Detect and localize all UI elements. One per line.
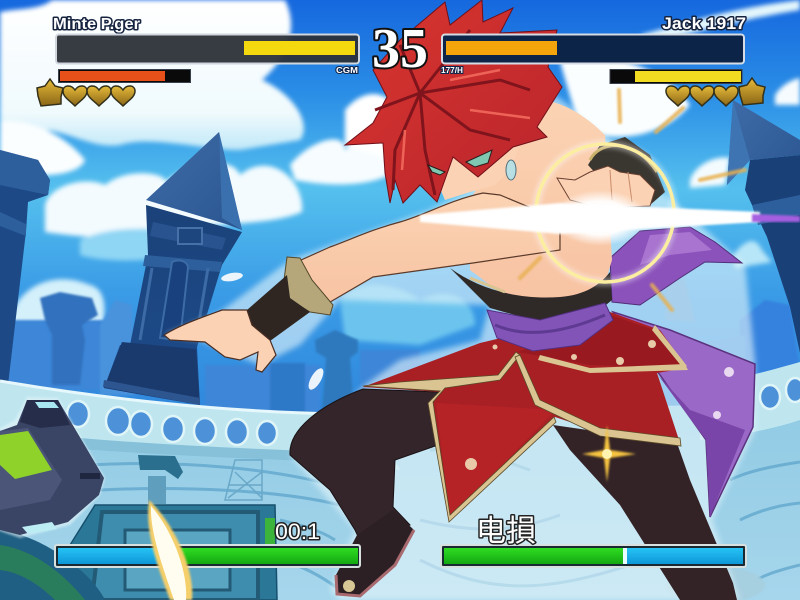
torso: [470, 100, 612, 300]
lime screen: [0, 431, 52, 479]
player two stamina bar: [441, 545, 746, 567]
gloved fist: [588, 137, 665, 205]
arena seating rows: [90, 449, 800, 590]
teal panel machine: [70, 505, 277, 600]
small tower left: [40, 292, 98, 385]
golden sparkle: [582, 425, 636, 482]
big tower: [103, 132, 242, 405]
arena scaffold: [225, 460, 262, 500]
outstretched arm: [290, 193, 560, 305]
device with lime screen: [0, 397, 105, 538]
right edge tower: [727, 100, 800, 353]
player one special bar: [58, 70, 190, 82]
green curved ring foreground: [0, 530, 105, 600]
player two stamina label: 电損: [476, 515, 536, 548]
purple waist sash: [487, 303, 613, 351]
player one name: Minte P.ger: [53, 16, 140, 33]
left edge tower: [0, 150, 50, 385]
white feathers: [220, 271, 326, 392]
player one lives: [37, 79, 135, 106]
face: [430, 140, 522, 200]
clouds: [0, 0, 800, 345]
dark wrist cuff: [247, 275, 310, 341]
red skirt: [363, 312, 687, 520]
front leg: [290, 389, 440, 545]
skirt flower motifs: [465, 340, 656, 470]
yellow slash effect: [148, 500, 192, 600]
purple trailing sash: [613, 312, 755, 517]
stone drum at far right floor: [665, 567, 765, 600]
small tower centre: [315, 330, 358, 410]
golden energy ring: [536, 144, 674, 282]
dark top: [450, 268, 612, 322]
hair: [345, 0, 562, 203]
back leg: [553, 425, 737, 600]
distant city buildings: [0, 300, 800, 415]
white glow outline: [164, 95, 755, 600]
sash flower motifs: [713, 367, 734, 419]
arena wall with medallions: [0, 362, 800, 470]
upper purple sash wing: [610, 227, 742, 305]
pointing hand: [164, 310, 276, 372]
arena floor: [0, 362, 800, 600]
eyes: [466, 150, 492, 167]
player one health caption: CGM: [336, 66, 358, 75]
arm cuff ruffle: [284, 257, 333, 315]
camera on post: [138, 455, 183, 504]
player two name: Jack 1917: [662, 14, 746, 33]
player two lives: [666, 78, 765, 106]
white energy beam: [420, 190, 800, 246]
energy sparks: [520, 90, 745, 310]
shoe: [336, 510, 414, 596]
player two health caption: 177/H: [441, 66, 463, 75]
player two special bar: [610, 70, 742, 84]
player two health bar: [442, 34, 744, 64]
player one health bar: [56, 34, 359, 64]
player one stamina label: 00:1: [275, 519, 320, 544]
sky background: [0, 0, 800, 420]
player one stamina bar: [55, 545, 360, 567]
round timer: 35: [372, 18, 428, 80]
earring: [506, 160, 516, 180]
fighter: [164, 0, 755, 600]
right distant tower: [665, 278, 695, 322]
